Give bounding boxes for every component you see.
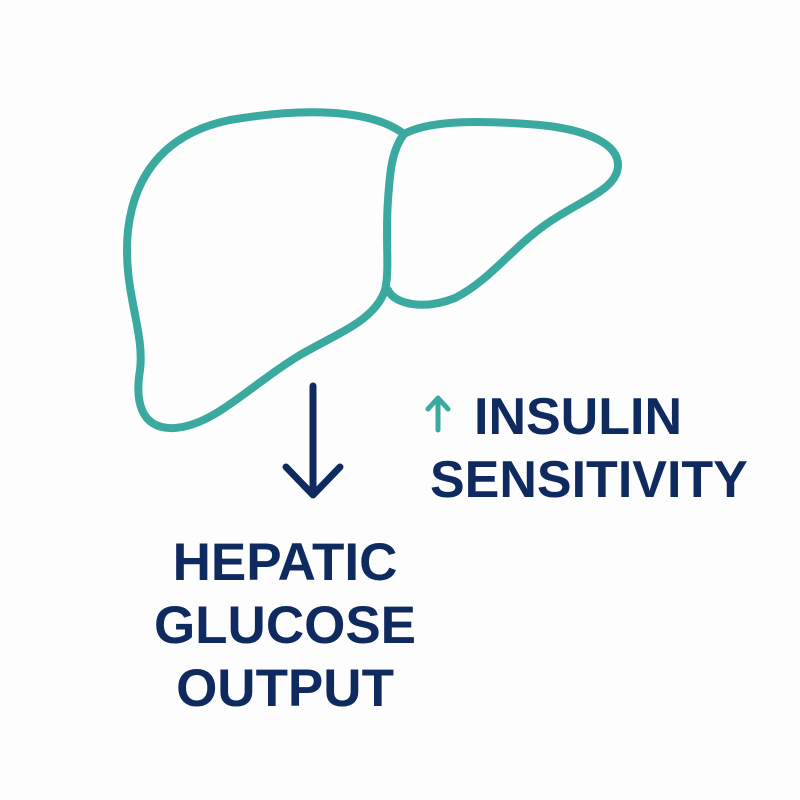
arrow: up small bbox=[428, 398, 448, 430]
text: insulin sensitivity: SENSITIVITY bbox=[430, 451, 748, 509]
text: hepatic glucose output: OUTPUT bbox=[176, 659, 394, 718]
text: insulin sensitivity: INSULIN bbox=[474, 388, 682, 446]
arrow: down bbox=[286, 386, 340, 495]
text: hepatic glucose output: HEPATIC bbox=[173, 533, 397, 592]
text: hepatic glucose output: GLUCOSE bbox=[154, 596, 416, 655]
text: hepatic glucose output bbox=[154, 533, 416, 718]
text: insulin sensitivity bbox=[430, 388, 748, 509]
